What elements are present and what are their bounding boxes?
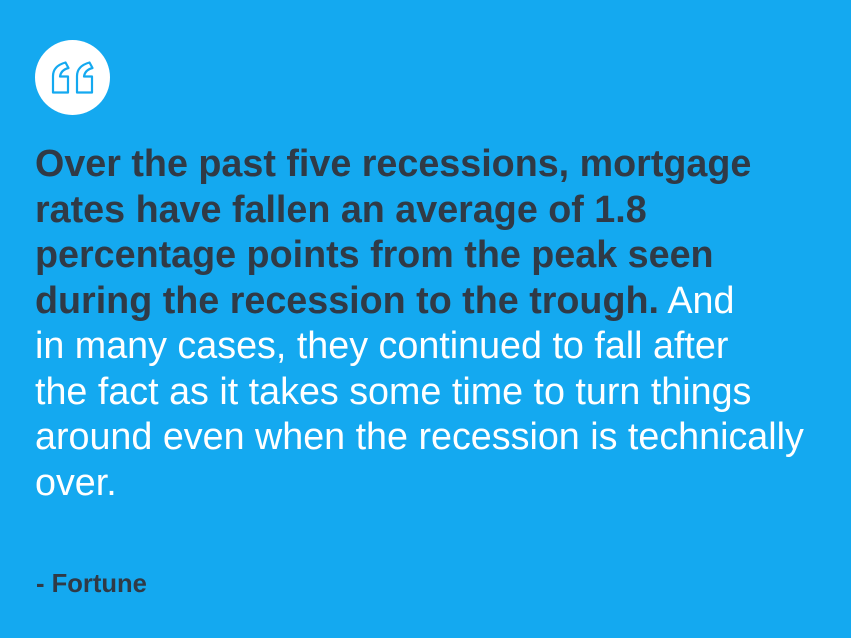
quote text: percentage points from the peak seen (35, 233, 714, 275)
quote text: over. (35, 461, 117, 503)
quote text: around even when the recession is technically (35, 415, 804, 457)
quote text: rates have fallen an average of 1.8 (35, 188, 647, 230)
source attribution: - Fortune (36, 570, 147, 598)
quote text: during the recession to the trough. And (35, 279, 734, 321)
quote text: in many cases, they continued to fall after (35, 324, 728, 366)
icon: quotation mark badge (35, 40, 110, 115)
quote text: the fact as it takes some time to turn things (35, 370, 751, 412)
quote text: Over the past five recessions, mortgage (35, 142, 751, 184)
